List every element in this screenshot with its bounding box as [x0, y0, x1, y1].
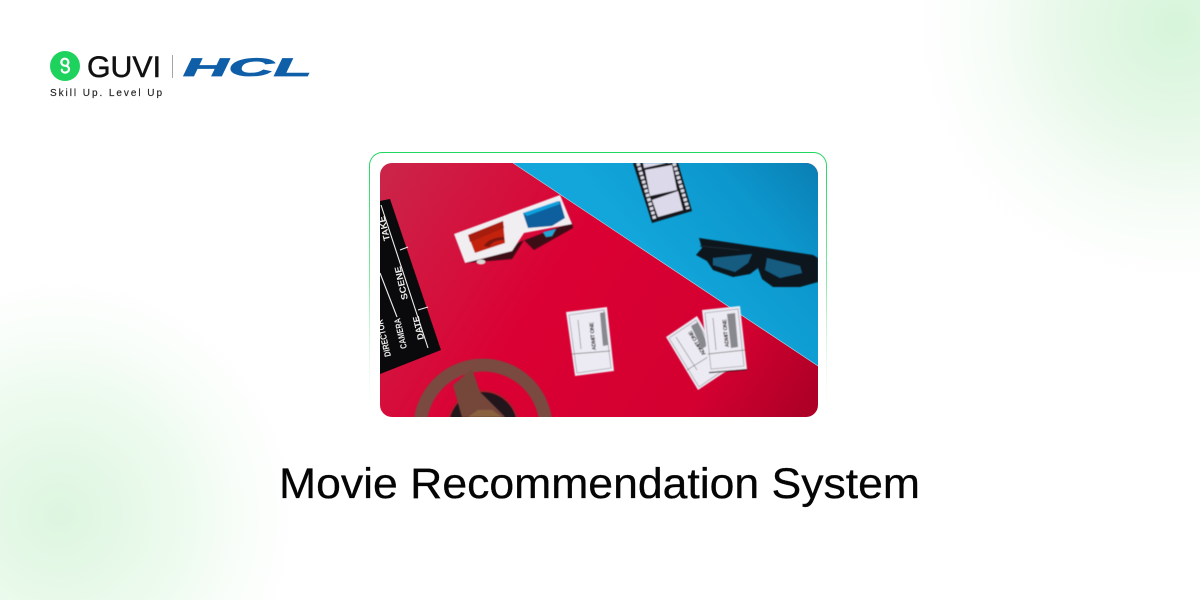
photo: movie props on red and blue [380, 163, 818, 417]
ticket: front: ADMIT ONE [722, 319, 731, 347]
red background [380, 163, 818, 417]
ticket: rotated: ADMIT ONE [688, 329, 708, 356]
ticket: single: ADMIT ONE [589, 322, 598, 350]
image card frame [370, 152, 826, 428]
blue diagonal area [513, 163, 818, 366]
tagline: Skill Up. Level Up [50, 88, 162, 99]
icon: 3D glasses [454, 195, 573, 264]
icon: GUVI badge [50, 51, 80, 81]
GUVI wordmark: GUVI [87, 51, 161, 84]
background glow: top right [880, 0, 1200, 320]
diagonal highlight [513, 163, 818, 366]
title: Movie Recommendation System [279, 460, 920, 508]
background glow: bottom left [0, 240, 335, 600]
icon: clapperboard: SCENE [393, 265, 410, 301]
icon: clapperboard: DATE [411, 315, 426, 341]
logo divider [172, 55, 173, 78]
HCL wordmark: HCL [183, 54, 312, 82]
icon: clapperboard: CAMERA [392, 317, 409, 350]
ticket: front [702, 306, 747, 373]
logo lockup [50, 51, 312, 99]
icon: clapperboard: DIRECTOR [375, 318, 393, 358]
icon: clapperboard [375, 199, 441, 374]
icon: film reel [414, 358, 552, 417]
ticket: rotated [666, 316, 728, 390]
icon: black glasses [696, 238, 818, 287]
icon: film strip [633, 162, 692, 223]
icon: clapperboard: TAKE [377, 215, 392, 242]
ticket: single [566, 307, 614, 376]
